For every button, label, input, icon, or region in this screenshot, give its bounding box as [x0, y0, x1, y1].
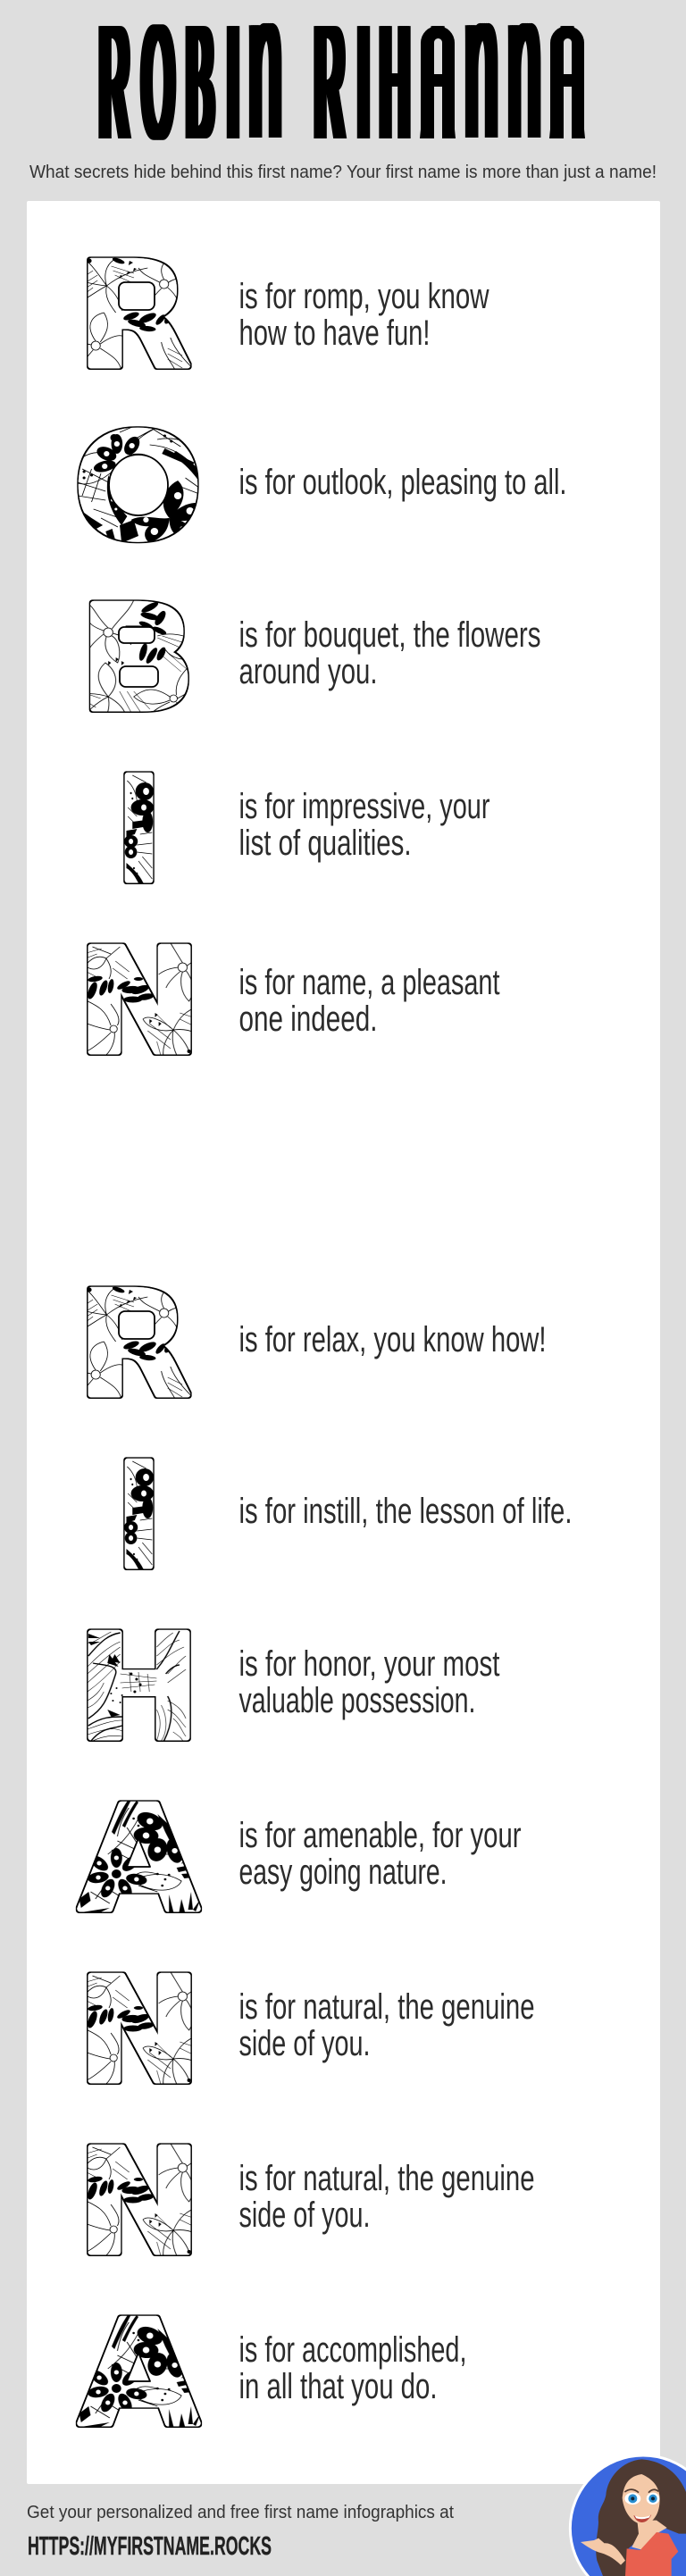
text: A line: easy going nature. [239, 1853, 447, 1892]
text: I line: is for impressive, your [239, 787, 489, 826]
text: H line: valuable possession. [239, 1681, 475, 1720]
text: I line: list of qualities. [239, 824, 411, 863]
text: N line: is for natural, the genuine [239, 1987, 534, 2027]
icon: letter H: H [78, 1605, 200, 1772]
text: N line: is for name, a pleasant [239, 963, 500, 1002]
footer text: Get your personalized and free first name infographics at [27, 2503, 454, 2522]
row: O outlook [74, 405, 566, 571]
row: N name [78, 919, 500, 1085]
icon: letter A: A [79, 2291, 198, 2458]
icon: letter B: B [79, 576, 196, 742]
icon: letter I: I [116, 1434, 162, 1601]
icon: letter N: N [78, 919, 201, 1085]
row: I instill [116, 1434, 572, 1601]
text: N line [239, 963, 500, 1039]
text: N line: one indeed. [239, 999, 377, 1039]
row: N natural [78, 1948, 534, 2114]
row: B bouquet [79, 576, 541, 742]
icon: letter N: N [78, 1948, 201, 2114]
row: H honor [78, 1605, 500, 1772]
text: N line: side of you. [239, 2195, 370, 2235]
text: H line [239, 1644, 500, 1720]
text: R line: is for romp, you know [239, 277, 489, 316]
text: A line: in all that you do. [239, 2367, 438, 2406]
icon: letter O: O [74, 405, 202, 571]
text: A line [239, 2330, 466, 2406]
text: N line: is for natural, the genuine [239, 2159, 534, 2198]
text: A line: is for accomplished, [239, 2330, 466, 2370]
text: B line: around you. [239, 652, 377, 691]
text: R line: how to have fun! [239, 314, 431, 353]
icon: letter R: R [78, 1262, 190, 1429]
row: A accomplished [75, 2291, 466, 2458]
title [98, 0, 585, 182]
text: N line: side of you. [239, 2024, 370, 2063]
row: R relax [78, 1262, 547, 1429]
row: R romp [78, 233, 489, 400]
text: I line [239, 787, 489, 863]
text: B line: is for bouquet, the flowers [239, 615, 541, 655]
text: B line [239, 615, 541, 691]
text: N line [239, 2159, 534, 2235]
icon: letter I: I [116, 748, 162, 915]
subtitle: What secrets hide behind this first name? Your first name is more than just a name! [29, 163, 657, 182]
text: R line: is for relax, you know how! [239, 1320, 547, 1359]
icon: letter N: N [78, 2120, 201, 2286]
icon: letter R: R [78, 233, 190, 400]
row: I impressive [116, 748, 489, 915]
text: N line [239, 1987, 534, 2063]
text: H line: is for honor, your most [239, 1644, 500, 1684]
text: A line: is for amenable, for your [239, 1816, 522, 1855]
row: N natural second [78, 2120, 534, 2286]
icon: letter A: A [79, 1777, 198, 1944]
icon: avatar [554, 2447, 686, 2576]
row: A amenable [75, 1777, 522, 1944]
text: A line [239, 1816, 522, 1892]
text: R line [239, 277, 489, 353]
